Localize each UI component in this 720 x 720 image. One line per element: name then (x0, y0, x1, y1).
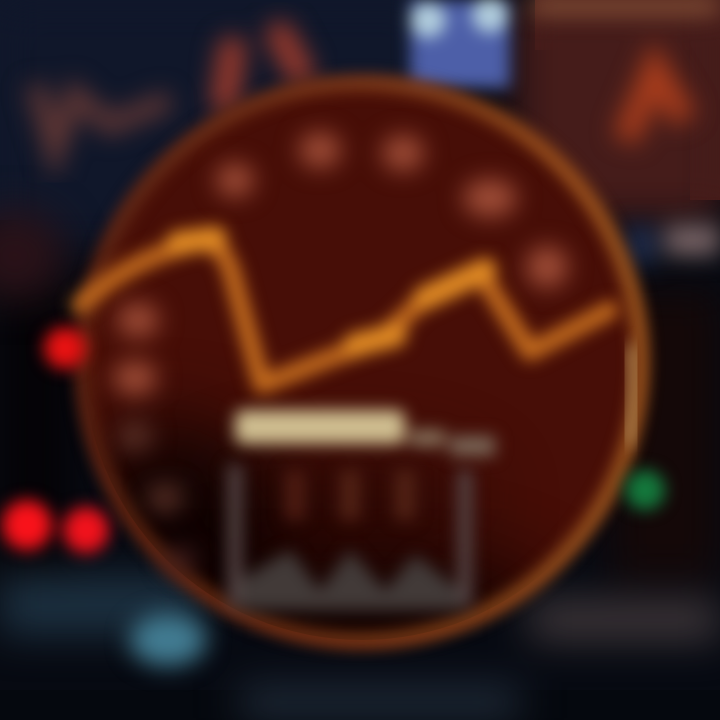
green indicator light (625, 470, 665, 510)
blurred bar table (235, 465, 465, 610)
blurred caption text block (235, 410, 495, 456)
top right glow and red line (530, 0, 720, 265)
disc rim (83, 83, 641, 641)
dark red haze at left edge (0, 210, 65, 300)
reddish peaks above disc (225, 35, 300, 100)
main disc (60, 80, 644, 700)
orange trend line (80, 238, 610, 385)
disc lower shading (98, 388, 549, 640)
red indicator lights (2, 327, 109, 553)
blue glow bottom left (130, 614, 206, 666)
pale edge highlight right (628, 345, 634, 445)
blue and white top tile (410, 0, 510, 88)
background chart top left (35, 85, 170, 150)
tick dots around dial (113, 132, 568, 572)
